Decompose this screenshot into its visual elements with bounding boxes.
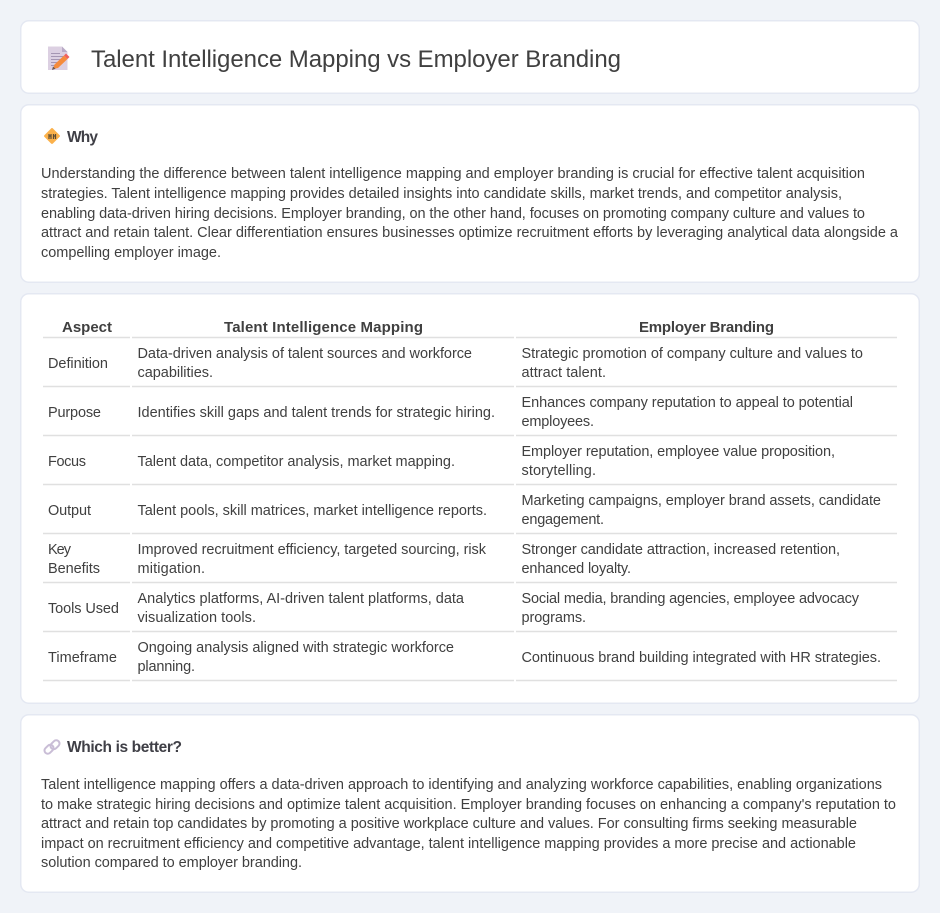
table header: Aspect xyxy=(62,319,112,336)
row: focus: Talent data, competitor analysis, market mapping. xyxy=(138,454,455,470)
row: timeframe: Continuous brand building integrated with HR strategies. xyxy=(522,650,881,666)
icon: warning diamond xyxy=(44,128,60,144)
row: focus: storytelling. xyxy=(522,463,596,479)
row: timeframe: planning. xyxy=(138,659,195,675)
row: focus: Employer reputation, employee value proposition, xyxy=(522,444,835,460)
text block: which is better xyxy=(41,777,896,871)
panel: comparison table xyxy=(21,294,919,703)
table header: Employer Branding xyxy=(639,319,774,336)
icon: memo xyxy=(48,46,70,70)
row: tools used: programs. xyxy=(522,610,586,626)
text block: why: enabling data-driven hiring decisions. Employer branding, on the other hand, focuses on promoting company culture and values to xyxy=(41,206,865,222)
row: tools used: Analytics platforms, AI-driven talent platforms, data xyxy=(138,591,465,607)
text block: which is better: to make strategic hiring decisions and optimize talent acquisition. Employer branding focuses on enhancing a company's reputation to xyxy=(41,797,896,813)
row: key benefits: Benefits xyxy=(48,561,100,577)
table header xyxy=(62,319,774,336)
row: tools used xyxy=(48,591,860,626)
row: definition: Data-driven analysis of talent sources and workforce xyxy=(138,346,472,362)
text block: why: attract and retain talent. Clear differentiation ensures businesses optimize recruitment efforts by leveraging analytical data alongside a xyxy=(41,225,899,241)
row: key benefits xyxy=(48,542,840,577)
row: output: Output xyxy=(48,503,91,519)
text block: why: strategies. Talent intelligence mapping provides detailed insights into candidate skills, market trends, and competitor analysis, xyxy=(41,186,842,202)
row: focus xyxy=(48,444,835,479)
row: definition: capabilities. xyxy=(138,365,213,381)
icon: link xyxy=(43,739,61,755)
row: purpose: employees. xyxy=(522,414,594,430)
row: output: Talent pools, skill matrices, market intelligence reports. xyxy=(138,503,487,519)
row: output: engagement. xyxy=(522,512,604,528)
row: key benefits: enhanced loyalty. xyxy=(522,561,631,577)
panel: which is better xyxy=(21,715,919,892)
row: output xyxy=(48,493,881,528)
panel: why xyxy=(21,105,919,282)
row: timeframe xyxy=(48,640,881,675)
row: timeframe: Ongoing analysis aligned with strategic workforce xyxy=(138,640,454,656)
row: definition xyxy=(48,346,863,381)
row: purpose: Purpose xyxy=(48,405,101,421)
row: tools used: visualization tools. xyxy=(138,610,256,626)
row: key benefits: Stronger candidate attraction, increased retention, xyxy=(522,542,840,558)
row: purpose xyxy=(48,395,853,430)
row: tools used: Tools Used xyxy=(48,601,119,617)
title: Talent Intelligence Mapping vs Employer Branding xyxy=(91,46,621,73)
text block: which is better: solution compared to employer branding. xyxy=(41,855,302,871)
row: focus: Focus xyxy=(48,454,86,470)
table header: Talent Intelligence Mapping xyxy=(224,319,423,336)
row: key benefits: Key xyxy=(48,542,72,558)
row: definition: Strategic promotion of company culture and values to xyxy=(522,346,863,362)
text block: which is better: impact on recruitment efficiency and competitive advantage, talent intelligence mapping provides a more precise and actionable xyxy=(41,836,856,852)
row: purpose: Enhances company reputation to appeal to potential xyxy=(522,395,853,411)
heading: which is better: Which is better? xyxy=(67,739,182,756)
row: output: Marketing campaigns, employer brand assets, candidate xyxy=(522,493,881,509)
text block: why xyxy=(41,166,899,261)
row: key benefits: Improved recruitment efficiency, targeted sourcing, risk xyxy=(138,542,487,558)
text block: why: compelling employer image. xyxy=(41,245,221,261)
text block: why: Understanding the difference between talent intelligence mapping and employer branding is crucial for effective talent acquisition xyxy=(41,166,865,182)
row: tools used: Social media, branding agencies, employee advocacy xyxy=(522,591,860,607)
row: definition: Definition xyxy=(48,356,108,372)
row: purpose: Identifies skill gaps and talent trends for strategic hiring. xyxy=(138,405,495,421)
text block: which is better: Talent intelligence mapping offers a data-driven approach to identifying and analyzing workforce capabilities, enabling organizations xyxy=(41,777,882,793)
row: definition: attract talent. xyxy=(522,365,606,381)
row: key benefits: mitigation. xyxy=(138,561,205,577)
text block: which is better: attract and retain top candidates by promoting a positive workplace culture and values. For consulting firms seeking measurable xyxy=(41,816,857,832)
panel: header xyxy=(21,21,919,93)
row: timeframe: Timeframe xyxy=(48,650,117,666)
heading: why: Why xyxy=(67,129,98,146)
